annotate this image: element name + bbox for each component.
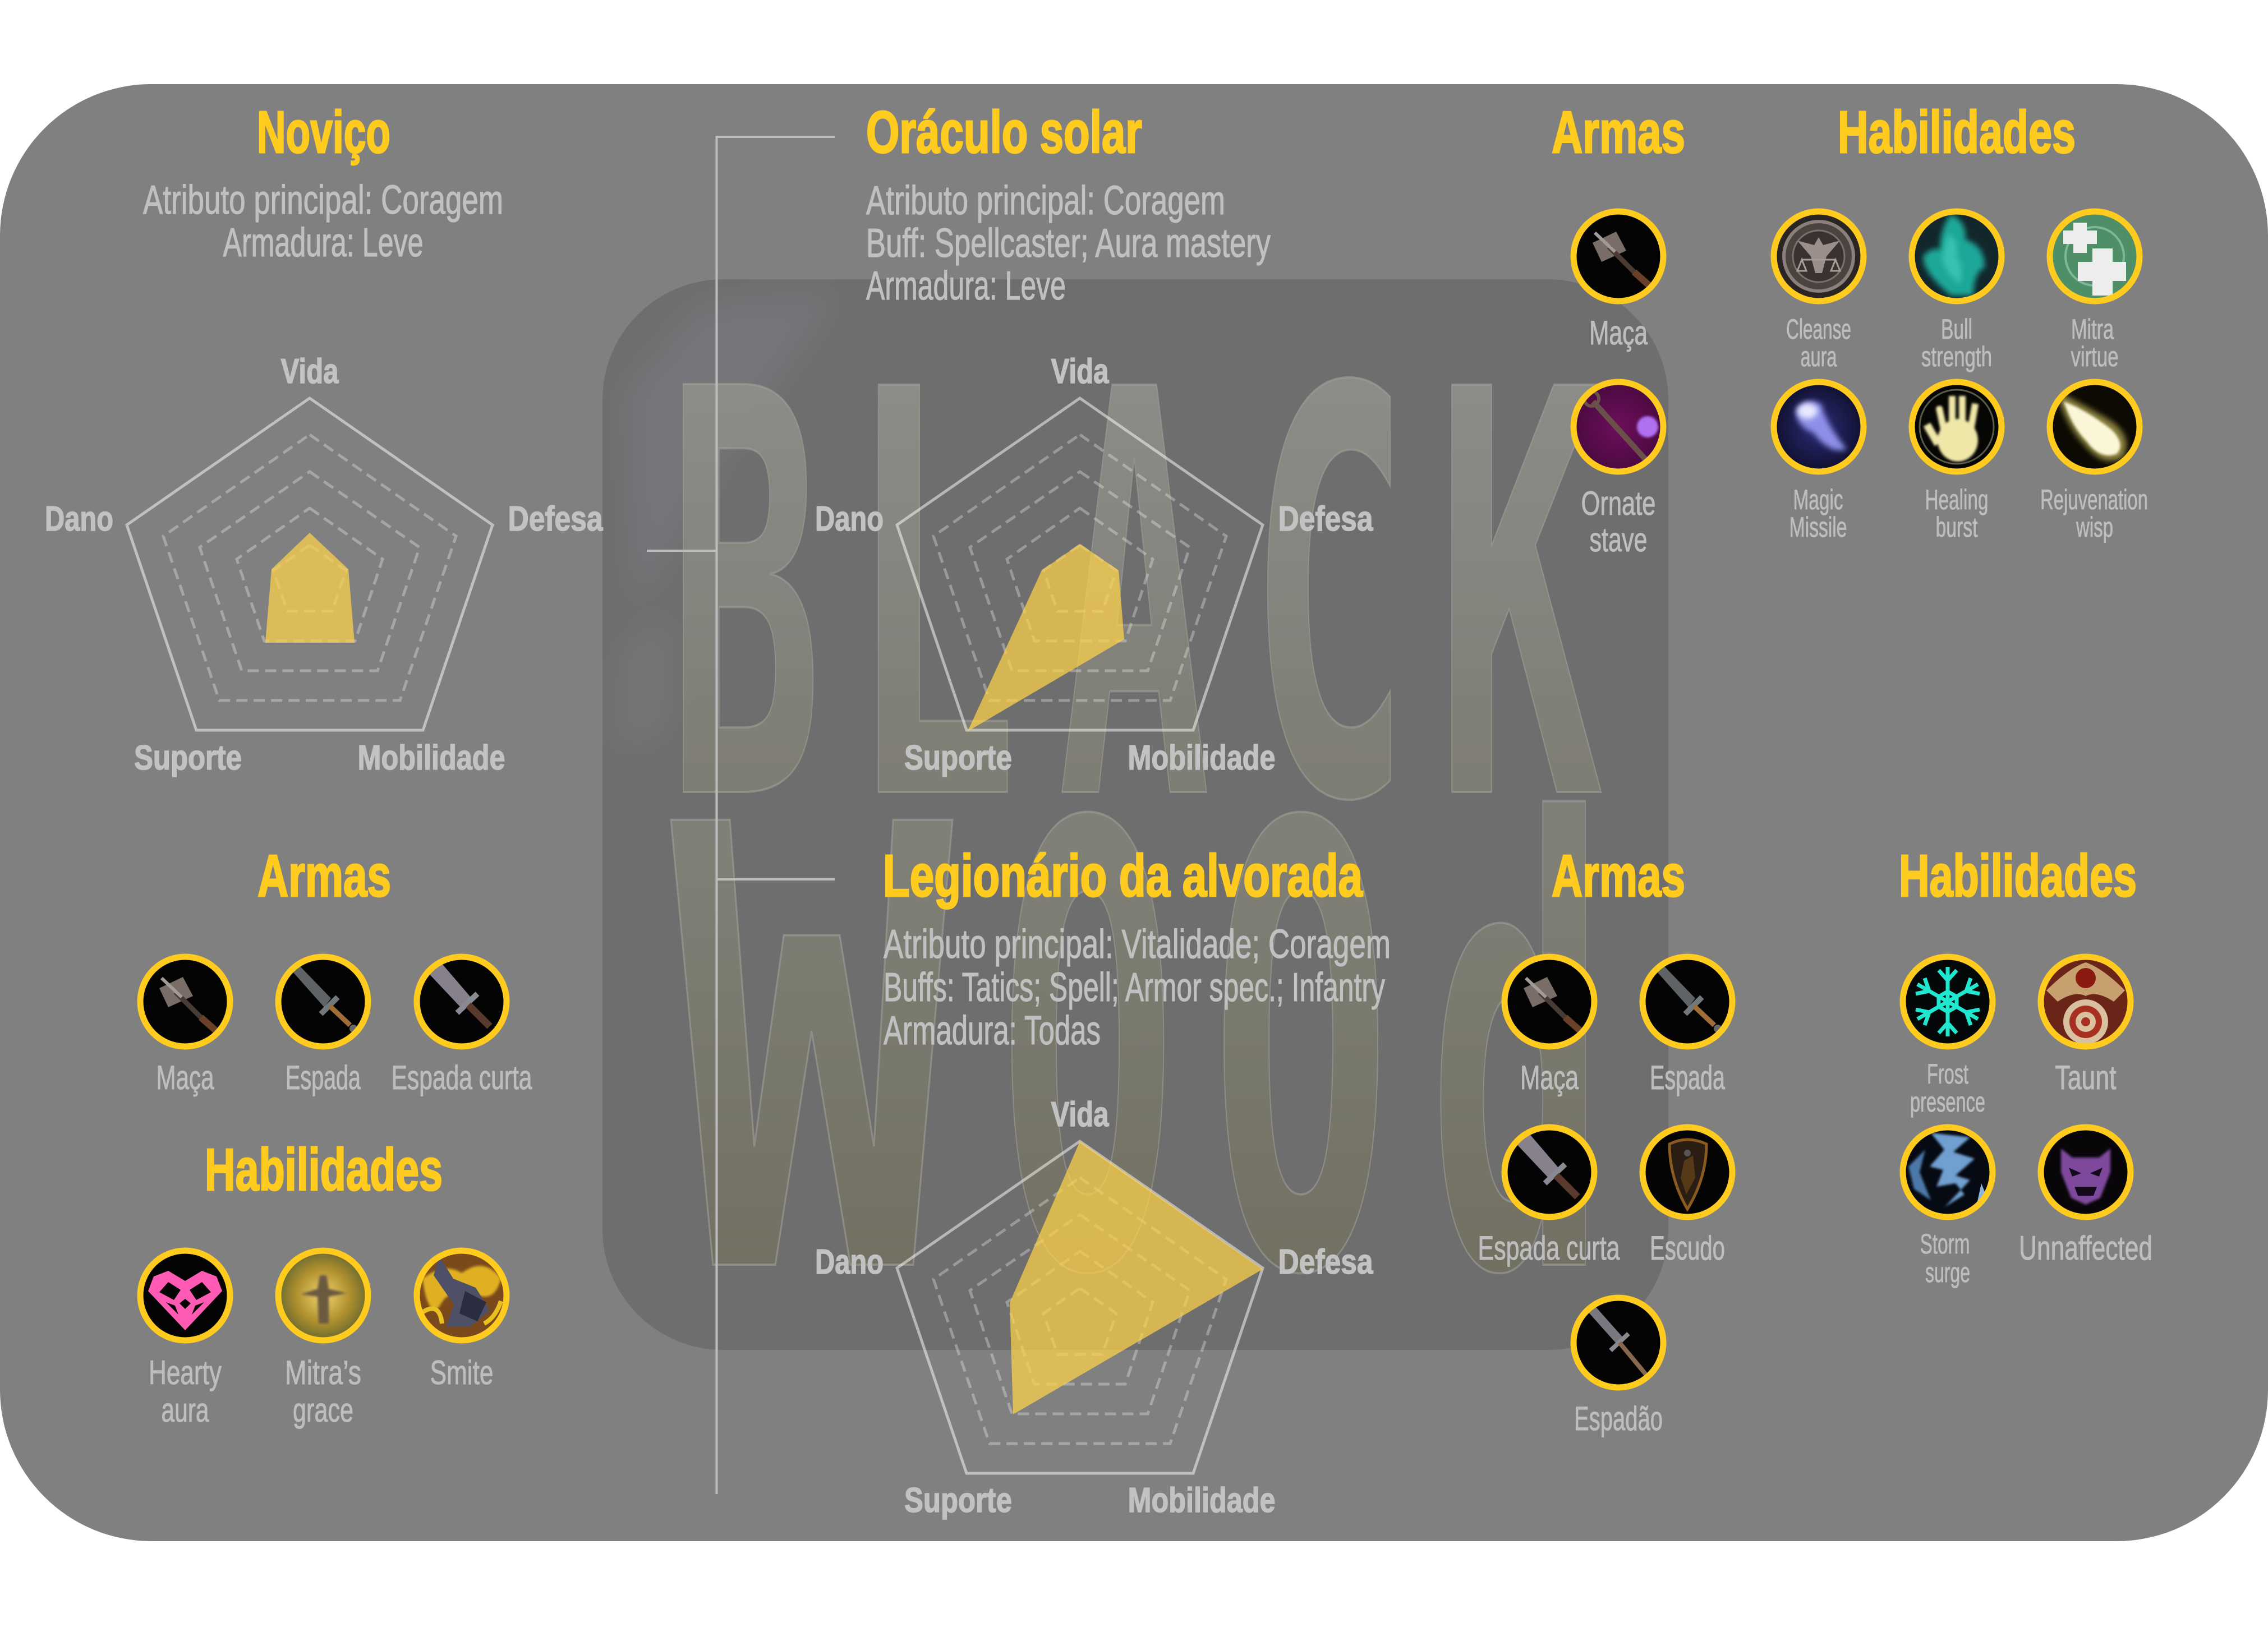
- icon: Escudo: [1643, 1127, 1732, 1217]
- icon: Bull strength: [1912, 211, 2002, 301]
- label: Healing burst: [1925, 484, 1988, 543]
- icon: Unnaffected: [2041, 1127, 2131, 1217]
- background art: Black Wood logo lettering: O: [1211, 698, 1391, 1409]
- label: Magic Missile: Magic: [1793, 484, 1843, 515]
- label: Maça: Maça: [156, 1059, 214, 1096]
- radar chart: Legionário da alvorada: Defesa: [1278, 1243, 1373, 1281]
- label: Espada: Espada: [286, 1059, 361, 1096]
- background art: Black Wood logo lettering: W: [671, 698, 956, 1409]
- label: Storm surge: [1920, 1228, 1970, 1288]
- label: Escudo: Escudo: [1650, 1229, 1725, 1267]
- heading: Habilidades: Habilidades: [1899, 843, 2137, 909]
- label: Mitra's grace: [285, 1354, 361, 1429]
- radar chart: Oráculo solar: [815, 352, 1373, 777]
- label: Storm surge: surge: [1925, 1257, 1970, 1288]
- background art: Black Wood logo lettering: B: [668, 273, 822, 924]
- label: Mitra's grace: grace: [293, 1391, 353, 1429]
- label: Hearty aura: [149, 1354, 222, 1429]
- icon: Maça: [1505, 957, 1594, 1046]
- icon: Espada: [1643, 957, 1732, 1046]
- heading: Armas: Armas: [1552, 843, 1685, 909]
- background art: Black Wood logo lettering: C: [1248, 273, 1410, 924]
- background art: Black Wood logo lettering: O: [999, 698, 1177, 1409]
- icon: Maça: [1574, 211, 1663, 301]
- text block: Legionário attributes: Buffs: Tatics; Spell; Armor spec.; Infantry: [884, 965, 1385, 1010]
- label: Hearty aura: aura: [162, 1391, 209, 1429]
- label: Frost presence: [1910, 1058, 1985, 1118]
- radar chart: Oráculo solar: Defesa: [1278, 500, 1373, 538]
- label: Frost presence: presence: [1910, 1086, 1985, 1118]
- background art: Black Wood logo lettering: K: [1436, 273, 1604, 924]
- label: Maça: Maça: [1520, 1059, 1579, 1096]
- text block: Oráculo solar attributes: Atributo principal: Coragem: [866, 178, 1225, 223]
- label: Ornate stave: stave: [1590, 521, 1647, 559]
- icon: Storm surge: [1903, 1127, 1993, 1217]
- radar chart: Noviço: Vida: [280, 352, 339, 391]
- icon: Smite: [417, 1251, 507, 1340]
- background art: Black Wood logo lettering: L: [847, 273, 1019, 924]
- panel: Legionário da alvorada: [815, 843, 2152, 1520]
- label: Frost presence: Frost: [1927, 1058, 1968, 1090]
- icon: Rejuvenation wisp: [2050, 382, 2140, 472]
- text block: Oráculo solar attributes: Armadura: Leve: [866, 264, 1066, 308]
- icon: Cleanse aura: [1774, 211, 1864, 301]
- label: Bull strength: strength: [1921, 341, 1992, 372]
- icon: Frost presence: [1903, 957, 1993, 1046]
- heading: Noviço: Noviço: [257, 99, 390, 165]
- text block: Legionário attributes: Atributo principal: Vitalidade; Coragem: [884, 922, 1391, 967]
- label: Smite: Smite: [430, 1354, 494, 1391]
- text: d: [1428, 698, 1607, 1409]
- text block: Noviço attributes: Atributo principal: Coragem: [143, 178, 503, 223]
- label: Mitra virtue: virtue: [2071, 341, 2118, 372]
- label: Espada curta: Espada curta: [392, 1059, 532, 1096]
- label: Unnaffected: Unnaffected: [2019, 1229, 2152, 1267]
- icon: Ornate stave: [1574, 382, 1663, 472]
- label: Healing burst: Healing: [1925, 484, 1988, 515]
- label: Magic Missile: Missile: [1789, 511, 1847, 543]
- icon: Magic Missile: [1774, 382, 1864, 472]
- icon: Healing burst: [1912, 382, 2002, 472]
- label: Espada: Espada: [1650, 1059, 1725, 1096]
- icon: Mitra virtue: [2050, 211, 2140, 301]
- text block: Legionário attributes: Armadura: Todas: [884, 1008, 1101, 1053]
- icon: Espada: [278, 957, 368, 1046]
- label: Taunt: Taunt: [2055, 1059, 2117, 1096]
- radar chart: Legionário da alvorada: Vida: [1051, 1095, 1109, 1134]
- label: Ornate stave: Ornate: [1581, 485, 1656, 522]
- radar chart: Noviço: [45, 352, 603, 777]
- text block: Oráculo solar attributes: Buff: Spellcaster; Aura mastery: [866, 221, 1271, 266]
- heading: Habilidades: Habilidades: [205, 1137, 443, 1203]
- text block: Oráculo solar attributes: [866, 178, 1271, 308]
- label: Storm surge: Storm: [1920, 1228, 1970, 1260]
- label: Ornate stave: [1581, 485, 1656, 559]
- icon: Taunt: [2041, 957, 2131, 1046]
- heading: Armas: Armas: [1552, 99, 1685, 165]
- label: Hearty aura: Hearty: [149, 1354, 222, 1391]
- icon: Maça: [140, 957, 230, 1046]
- radar chart: Legionário da alvorada: Mobilidade: [1128, 1481, 1276, 1520]
- heading: Armas: Armas: [257, 843, 391, 909]
- radar chart: Noviço: Dano: [45, 500, 113, 538]
- icon: Espada curta: [1505, 1127, 1594, 1217]
- radar chart: Oráculo solar: Mobilidade: [1128, 739, 1276, 777]
- background art: Black Wood logo lettering: [668, 273, 1607, 1409]
- icon: Mitra's grace: [278, 1251, 368, 1340]
- radar chart: Oráculo solar: Suporte: [904, 739, 1012, 777]
- icon: Espadão: [1574, 1298, 1663, 1387]
- radar chart: Legionário da alvorada: Dano: [815, 1243, 884, 1281]
- label: Cleanse aura: [1786, 314, 1851, 372]
- label: Magic Missile: [1789, 484, 1847, 543]
- label: Cleanse aura: Cleanse: [1786, 314, 1851, 345]
- radar chart: Legionário da alvorada: [815, 1095, 1373, 1520]
- text block: Noviço attributes: Armadura: Leve: [223, 220, 423, 265]
- label: Maça: Maça: [1589, 314, 1648, 352]
- label: Cleanse aura: aura: [1801, 341, 1837, 372]
- label: Rejuvenation wisp: Rejuvenation: [2040, 484, 2148, 515]
- heading: Oráculo solar: Oráculo solar: [866, 99, 1142, 165]
- panel: Oráculo solar: [815, 99, 2148, 777]
- label: Espada curta: Espada curta: [1478, 1229, 1620, 1267]
- label: Mitra's grace: Mitra’s: [285, 1354, 361, 1391]
- panel: Noviço: [45, 99, 603, 1429]
- label: Rejuvenation wisp: [2040, 484, 2148, 543]
- label: Bull strength: [1921, 314, 1992, 372]
- icon: Espada curta: [417, 957, 507, 1046]
- radar chart: Legionário da alvorada: Suporte: [904, 1481, 1012, 1520]
- heading: Legionário da alvorada: Legionário da alvorada: [883, 843, 1363, 909]
- label: Mitra virtue: Mitra: [2071, 314, 2114, 345]
- label: Espadão: Espadão: [1574, 1400, 1663, 1437]
- icon: Hearty aura: [140, 1251, 230, 1340]
- radar chart: Noviço: Mobilidade: [358, 739, 505, 777]
- background art: Black Wood logo lettering: A: [1058, 273, 1211, 924]
- label: Bull strength: Bull: [1941, 314, 1972, 345]
- radar chart: Oráculo solar: Vida: [1051, 352, 1109, 391]
- radar chart: Oráculo solar: Dano: [815, 500, 884, 538]
- label: Rejuvenation wisp: wisp: [2076, 511, 2113, 543]
- text block: Noviço attributes: [143, 178, 503, 265]
- label: Mitra virtue: [2071, 314, 2118, 372]
- radar chart: Noviço: Suporte: [134, 739, 242, 777]
- background art: dark rounded rectangle: [602, 279, 1668, 1350]
- connector lines: [647, 137, 835, 1494]
- radar chart: Noviço: Defesa: [508, 500, 603, 538]
- label: Healing burst: burst: [1935, 511, 1978, 543]
- text block: Legionário attributes: [884, 922, 1391, 1053]
- heading: Habilidades: Habilidades: [1838, 99, 2076, 165]
